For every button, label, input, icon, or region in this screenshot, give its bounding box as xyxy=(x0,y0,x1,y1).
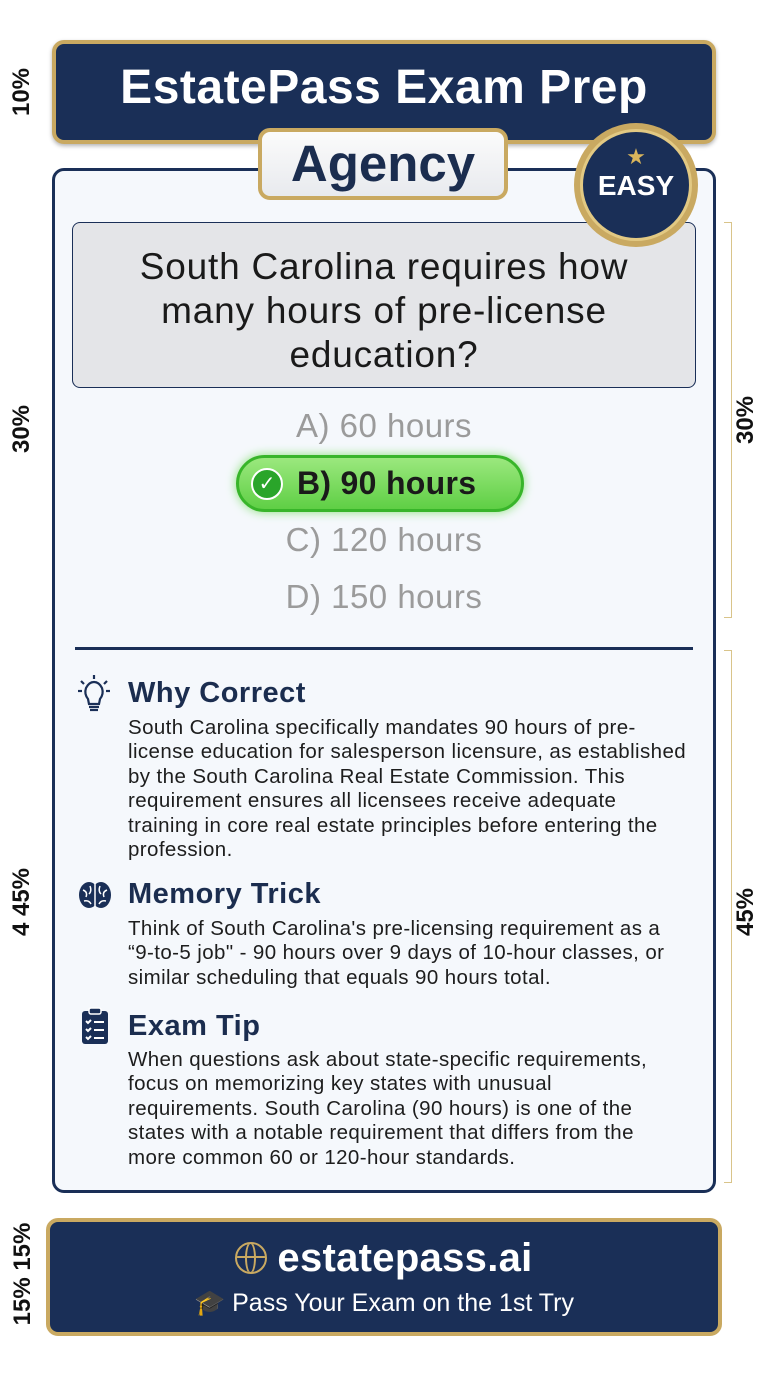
footer url with globe icon: estatepass.ai xyxy=(277,1236,533,1280)
check icon xyxy=(251,468,283,500)
category badge: Agency xyxy=(258,128,508,200)
option D: D) 150 hours xyxy=(286,578,482,615)
text: why correct: license education for salesperson licensure, as established xyxy=(128,740,686,763)
text: why correct xyxy=(128,716,686,861)
option B correct: B) 90 hours xyxy=(297,465,476,501)
option C: C) 120 hours xyxy=(286,521,482,558)
text: why correct: South Carolina specifically mandates 90 hours of pre- xyxy=(128,716,636,739)
tagline: 🎓 Pass Your Exam on the 1st Try xyxy=(194,1289,574,1317)
question box: South Carolina requires how xyxy=(140,246,628,287)
question box xyxy=(72,222,696,388)
side label: 30% right: 30% xyxy=(732,396,759,444)
text: why correct: requirement ensures all licensees receive adequate xyxy=(128,789,616,812)
text: exam tip: When questions ask about state-specific requirements, xyxy=(128,1048,647,1071)
question box: many hours of pre-license xyxy=(161,290,607,331)
header banner xyxy=(52,40,716,144)
heading: Memory Trick: Memory Trick xyxy=(128,878,321,910)
heading: Exam Tip: Exam Tip xyxy=(128,1010,260,1042)
text: exam tip: focus on memorizing key states with unusual xyxy=(128,1072,552,1095)
text: exam tip: states with a notable requirement that differs from the xyxy=(128,1121,634,1144)
side label: 45% right: 45% xyxy=(732,888,759,936)
bracket right top xyxy=(724,222,732,618)
text: why correct: by the South Carolina Real Estate Commission. This xyxy=(128,765,625,788)
text: memory trick: Think of South Carolina's pre-licensing requirement as a xyxy=(128,917,660,940)
text: why correct: profession. xyxy=(128,838,233,861)
seal: EASY: EASY xyxy=(598,170,674,201)
main panel xyxy=(52,168,716,1193)
side label: 4 45%: 4 45% xyxy=(8,868,35,936)
bracket right bottom xyxy=(724,650,732,1183)
category badge: Agency: Agency xyxy=(291,135,475,192)
question box: education? xyxy=(289,334,479,375)
heading: Why Correct: Why Correct xyxy=(128,677,306,709)
text: exam tip: requirements. South Carolina (90 hours) is one of the xyxy=(128,1097,632,1120)
title: EstatePass Exam Prep xyxy=(120,61,648,114)
seal: EASY: ★ xyxy=(626,144,646,169)
option A: A) 60 hours xyxy=(296,407,472,444)
text: exam tip: more common 60 or 120-hour standards. xyxy=(128,1146,515,1169)
footer banner xyxy=(46,1218,722,1336)
option B correct xyxy=(236,455,524,512)
check icon: ✓ xyxy=(259,473,275,495)
text: memory trick: “9-to-5 job" - 90 hours over 9 days of 10-hour classes, or xyxy=(128,941,664,964)
seal: EASY xyxy=(574,123,698,247)
icon: lightbulb xyxy=(78,675,110,712)
icon: clipboard xyxy=(82,1008,108,1044)
text: why correct: training in core real estate principles before entering the xyxy=(128,814,658,837)
icon: brain xyxy=(79,882,111,908)
side label: 15% 15%: 15% 15% xyxy=(9,1223,36,1325)
text: exam tip xyxy=(128,1048,647,1169)
text: memory trick xyxy=(128,917,664,989)
side label: 30% left: 30% xyxy=(8,405,35,453)
side label: 10%: 10% xyxy=(8,68,35,116)
text: memory trick: similar scheduling that equals 90 hours total. xyxy=(128,966,551,989)
